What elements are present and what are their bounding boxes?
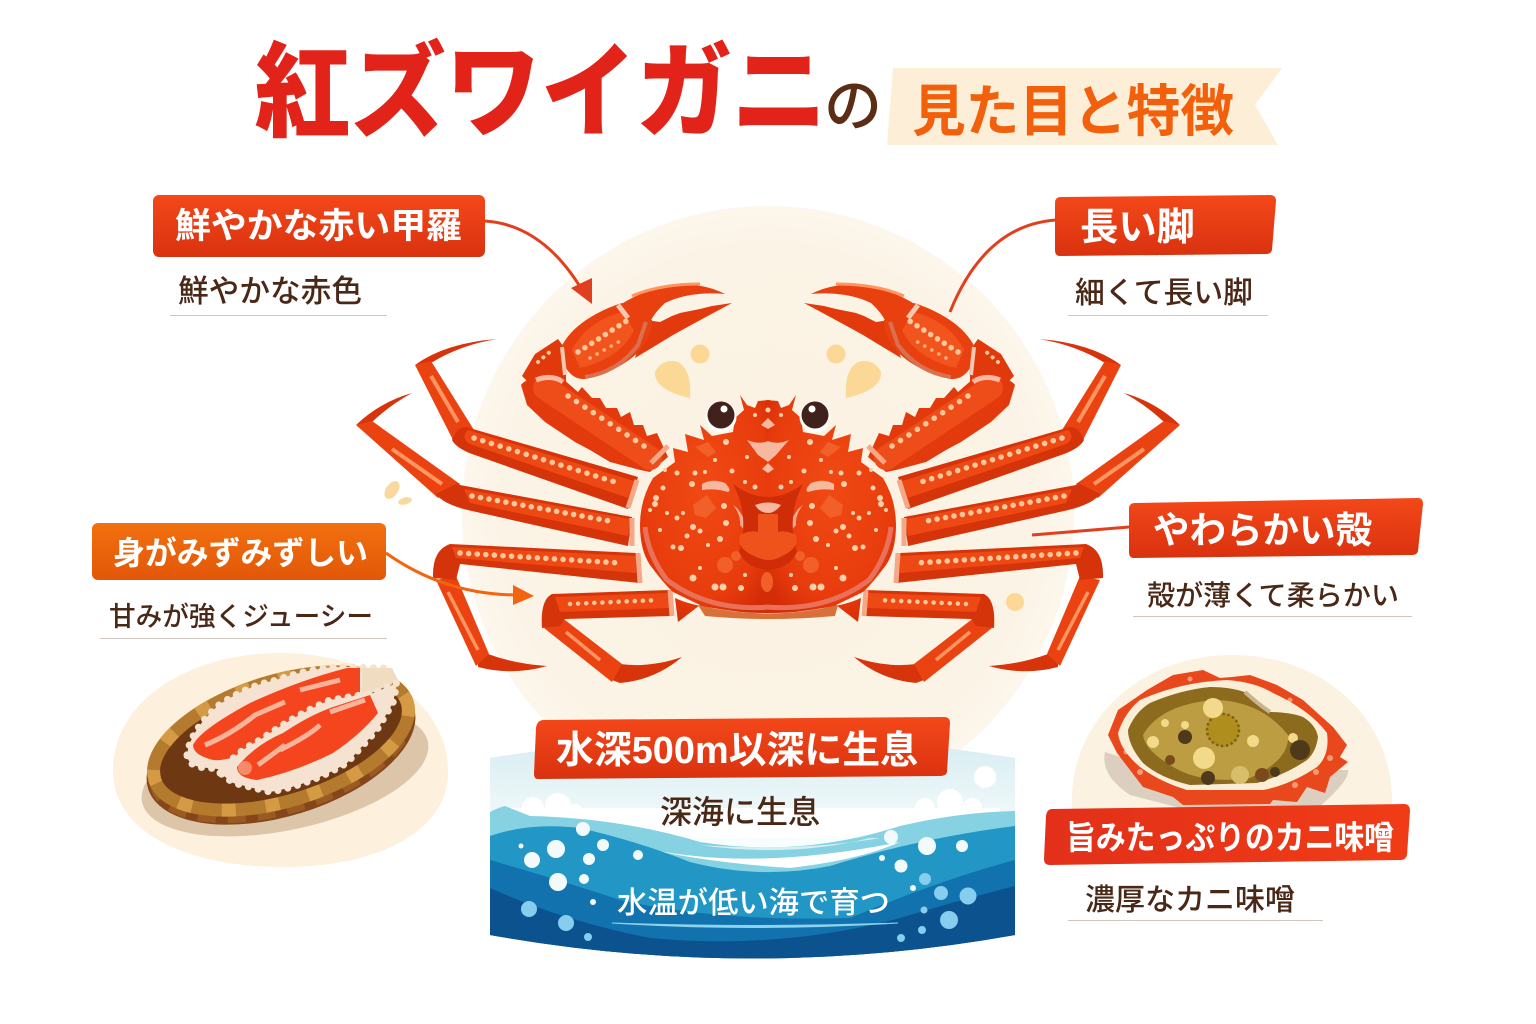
shell fold	[1245, 692, 1270, 712]
leg 3	[433, 544, 640, 671]
body half shell	[640, 395, 770, 622]
drop accents	[655, 344, 710, 398]
crab miso shell	[1072, 655, 1392, 812]
shell spots	[648, 408, 770, 591]
label: 旨みたっぷりのカニ味噌: 旨みたっぷりのカニ味噌	[1066, 819, 1394, 856]
crab left half limbs	[356, 284, 770, 683]
shell cream ring	[1118, 680, 1328, 790]
label: 鮮やかな赤い甲羅: 鮮やかな赤い甲羅	[175, 207, 462, 246]
plate backdrop	[113, 653, 448, 867]
depth sub text: 深海に生息	[660, 794, 820, 830]
bubbles upper	[518, 766, 996, 905]
accent drops left	[381, 478, 413, 506]
crab illustration	[356, 284, 1180, 683]
label: 長い脚	[1055, 195, 1276, 256]
background circle	[462, 206, 1074, 818]
crab meat 2	[220, 683, 397, 792]
claw	[521, 284, 732, 472]
title	[255, 35, 1282, 150]
accent dot right	[1006, 593, 1024, 611]
deep sea panel	[490, 736, 1015, 958]
shell rim spots	[1124, 676, 1333, 788]
title particle: の	[824, 74, 882, 139]
shell pale markings	[645, 481, 770, 608]
leg 2	[356, 393, 632, 546]
crab meat 1	[187, 667, 398, 769]
miso shadow	[1104, 752, 1348, 808]
leg 1	[415, 339, 638, 509]
label: 水深500m以深に生息: 水深500m以深に生息	[556, 730, 918, 772]
arrow: juicy meat	[386, 553, 534, 605]
under-belly	[698, 605, 838, 619]
eye	[706, 402, 736, 432]
shell rim	[1108, 670, 1348, 805]
crab centre face	[733, 418, 803, 592]
crab right half limbs	[766, 284, 1180, 683]
label: 旨みたっぷりのカニ味噌	[1044, 804, 1410, 865]
arrow: soft shell	[1032, 527, 1129, 535]
light strip	[612, 923, 898, 928]
sub: 細くて長い脚: 細くて長い脚	[1075, 277, 1253, 310]
label: 身がみずみずしい	[92, 523, 386, 580]
plate shadow	[130, 685, 440, 859]
label: 鮮やかな赤い甲羅	[153, 195, 485, 257]
label: 水深500m以深に生息	[534, 717, 950, 779]
miso backdrop	[1072, 655, 1392, 812]
sub: 甘みが強くジューシー: 甘みが強くジューシー	[109, 602, 373, 632]
bubbles lower	[521, 873, 976, 942]
sky	[490, 736, 1015, 850]
crab meat plate	[113, 642, 448, 867]
title sub text: 見た目と特徴	[912, 80, 1234, 143]
label: やわらかい殻	[1129, 498, 1423, 558]
plate	[128, 642, 434, 854]
arrow: shell	[485, 221, 592, 304]
clouds	[500, 789, 1000, 838]
title ribbon	[887, 68, 1282, 145]
label: やわらかい殻: やわらかい殻	[1153, 510, 1372, 551]
sub: 鮮やかな赤色: 鮮やかな赤色	[178, 274, 362, 309]
leg 4	[542, 590, 682, 683]
sub: 殻が薄くて柔らかい: 殻が薄くて柔らかい	[1147, 580, 1399, 611]
shell orange patches	[693, 442, 741, 573]
label: 長い脚: 長い脚	[1080, 207, 1195, 249]
miso filling	[1128, 687, 1318, 785]
title main text: 紅ズワイガニ	[255, 35, 827, 150]
label: 身がみずみずしい: 身がみずみずしい	[113, 535, 368, 571]
sub: 濃厚なカニ味噌: 濃厚なカニ味噌	[1085, 884, 1295, 917]
arrow: legs	[950, 220, 1056, 312]
water body	[490, 806, 1015, 958]
temperature text: 水温が低い海で育つ	[617, 887, 890, 920]
